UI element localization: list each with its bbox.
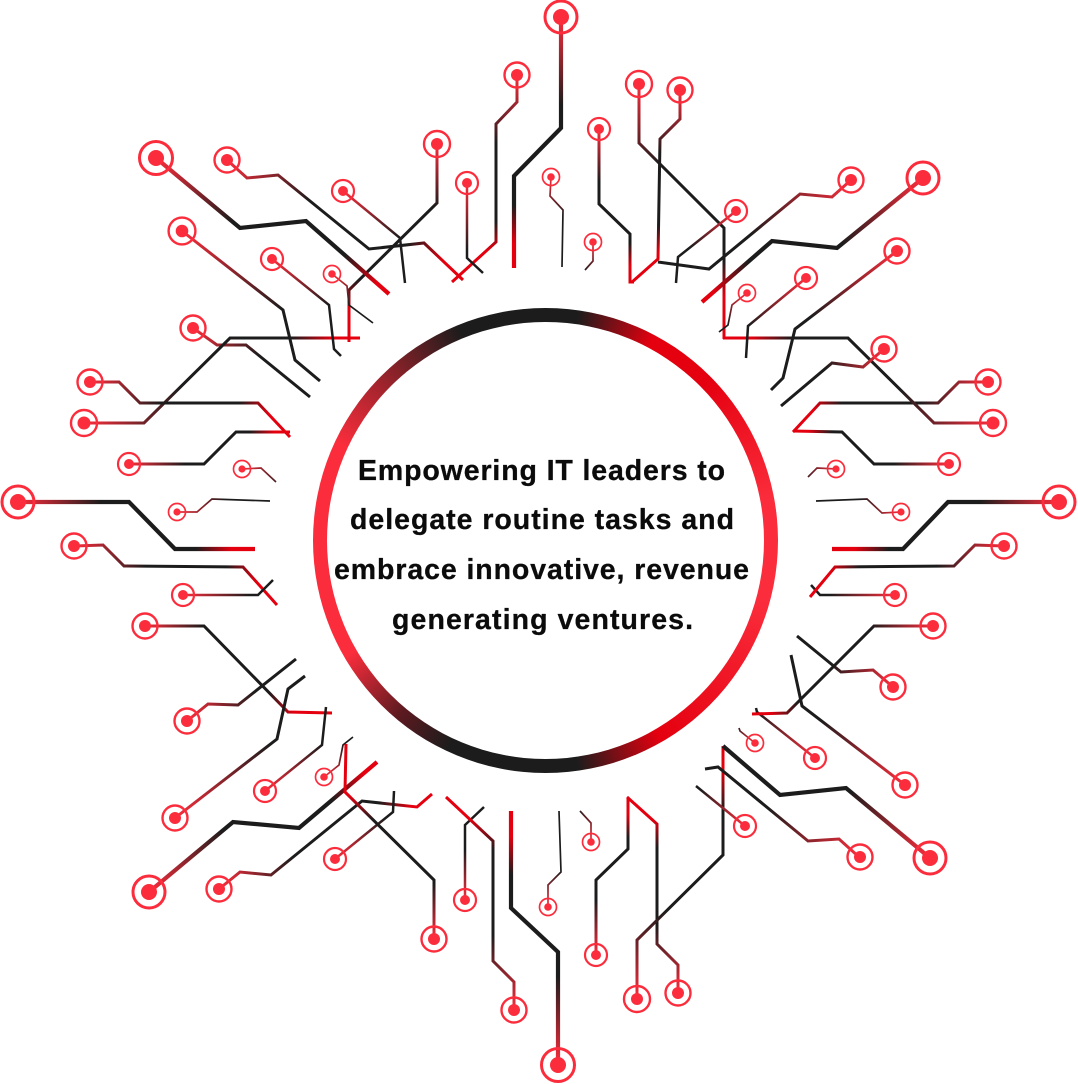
circuit trace: bottom left 5 [454,807,484,911]
circuit trace: top left 2 [349,131,450,342]
circuit trace: bottom left 2 [206,794,432,902]
circuit trace: top left 5 [214,148,463,280]
circuit trace: right 7 [793,370,1000,432]
circuit trace: bottom [511,811,574,1082]
circuit trace: bottom left 1 [133,762,377,908]
circuit trace: upper left 1 [169,218,320,381]
circuit trace: left 7 [172,580,273,606]
circuit trace: upper left 2 [180,316,310,397]
circuit trace: bottom left 4 [345,744,446,952]
circuit trace: lower right 4 [797,636,906,700]
circuit trace: left 6 [62,534,277,605]
circuit trace: top small 1 [542,168,563,267]
circuit trace: top left 1 [452,62,530,282]
headline text: Empowering IT leaders to [358,455,725,487]
circuit trace: lower right 5 [752,614,946,714]
circuit trace: lower left 3 [162,676,305,830]
circuit trace: top left 4 [332,180,405,283]
circuit trace: bottom right 4 [696,786,756,837]
circuit trace: bottom left 3 [324,791,394,870]
circuit trace: lower left 2 [174,659,296,734]
circuit trace: bottom small 2 [580,811,600,850]
circuit trace: top left 3 [456,172,483,273]
circuit trace: bottom right 1 [585,799,628,966]
circuit trace: upper left 5 [324,266,373,323]
circuit trace: left 4 [168,499,270,520]
circuit trace: bottom left 6 [446,797,526,1022]
circuit trace: top right 6 [588,118,634,282]
circuit trace: right 4 [816,499,910,520]
circuit trace: top right 5 [632,78,692,282]
central ring [313,308,778,773]
headline text: embrace innovative, revenue [334,554,749,586]
circuit trace: upper left 3 [71,338,360,436]
circuit trace: left 3 [234,460,276,482]
circuit trace: left 2 [118,432,290,475]
circuit trace: lower right 2 [756,708,826,769]
circuit trace: right 1 [811,584,906,606]
circuit trace: right 8 [723,338,1006,436]
circuit trace: upper right 4 [719,284,756,332]
headline text: delegate routine tasks and [350,504,734,536]
circuit trace: bottom right 5 [705,767,872,870]
headline text [334,455,749,636]
circuit trace: lower right 3 [739,728,764,752]
circuit trace: top right 3 [658,168,864,269]
circuit trace: top right 4 [676,200,747,283]
circuit trace: top right 2 [702,162,939,302]
circuit trace: lower left 1 [132,614,332,713]
circuit trace: lower right 1 [791,655,918,798]
circuit trace: top left 6 [140,142,389,294]
circuit trace: lower left 5 [316,737,353,786]
circuit trace: upper right 1 [781,336,896,406]
circuit trace: bottom right 2 [627,797,690,1006]
circuit trace: upper right 3 [746,267,817,358]
circuit trace: left 1 [78,370,290,437]
headline text: generating ventures. [392,604,693,636]
circuit trace: left 5 [2,486,255,549]
circuit trace: lower left 4 [254,707,326,802]
circuit trace: right 2 [810,534,1016,597]
circuit trace: bottom right 6 [723,746,946,874]
circuit trace: top [514,1,577,268]
circuit trace: bottom right 3 [624,746,723,1012]
circuit trace: upper left 4 [261,248,341,356]
circuit trace: right 3 [832,486,1075,549]
circuit trace: top right 1 [626,71,724,339]
circuit trace: top small 2 [584,234,602,270]
circuit trace: bottom small 1 [540,811,561,916]
circuit trace: right 6 [793,431,960,475]
circuit trace: upper right 2 [771,238,910,390]
circuit trace: right 5 [808,460,844,478]
